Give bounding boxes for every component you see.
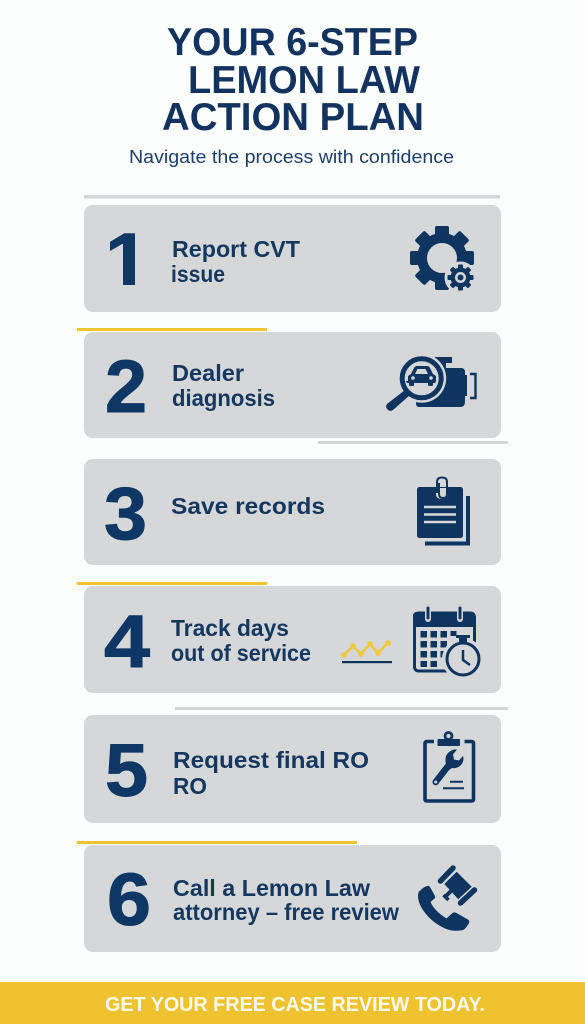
icon: clipped documents	[417, 478, 468, 544]
step text: call a lemon law attorney: Call a Lemon Law	[173, 875, 370, 901]
icon: calendar with stopwatch	[413, 608, 484, 680]
step text: dealer diagnosis: Dealer	[172, 360, 244, 386]
icon: gavel and phone	[418, 868, 474, 931]
step number 5: 5	[105, 729, 148, 812]
step number 4: 4	[104, 600, 150, 683]
step text: request final RO	[173, 747, 369, 799]
step number 6: 6	[107, 858, 151, 941]
step text: call a lemon law attorney	[173, 875, 399, 925]
step text: track days out of service: out of service	[171, 640, 311, 666]
step text: dealer diagnosis	[172, 360, 275, 411]
step text: report CVT issue	[171, 236, 300, 287]
call to action text: GET YOUR FREE CASE REVIEW TODAY.	[105, 994, 485, 1016]
step text: save records: Save records	[171, 493, 325, 519]
panel: step 1	[84, 205, 501, 312]
step number 1	[110, 233, 135, 285]
step number 1: 1	[105, 218, 150, 301]
step text: track days out of service	[171, 615, 311, 666]
step text: dealer diagnosis: diagnosis	[172, 385, 275, 411]
step text: report CVT issue: Report CVT	[172, 236, 300, 262]
subtitle: Navigate the process with confidence	[129, 147, 454, 167]
icon: engine under magnifier	[386, 354, 476, 411]
icon: clipboard with wrench	[425, 732, 474, 801]
icon: gears	[410, 226, 476, 294]
footer banner	[0, 982, 585, 1024]
panel: step 2	[84, 332, 501, 438]
title: ACTION PLAN	[162, 96, 424, 139]
panel: step 6	[84, 845, 501, 952]
step text: request final RO: Request final RO	[173, 747, 369, 773]
panel: step 5	[84, 715, 501, 823]
step text: report CVT issue: issue	[171, 261, 225, 287]
title	[162, 21, 424, 139]
step number 2: 2	[105, 345, 147, 428]
icon: trend line	[341, 640, 392, 663]
step number 3: 3	[104, 472, 147, 555]
step text: track days out of service: Track days	[171, 615, 289, 641]
title: LEMON LAW	[188, 59, 421, 102]
step text: call a lemon law attorney: attorney – free review	[173, 899, 399, 925]
title: YOUR 6-STEP	[167, 21, 418, 64]
panel: step 3	[84, 459, 501, 565]
step text: request final RO: RO	[173, 773, 207, 799]
panel: step 4	[84, 586, 501, 693]
